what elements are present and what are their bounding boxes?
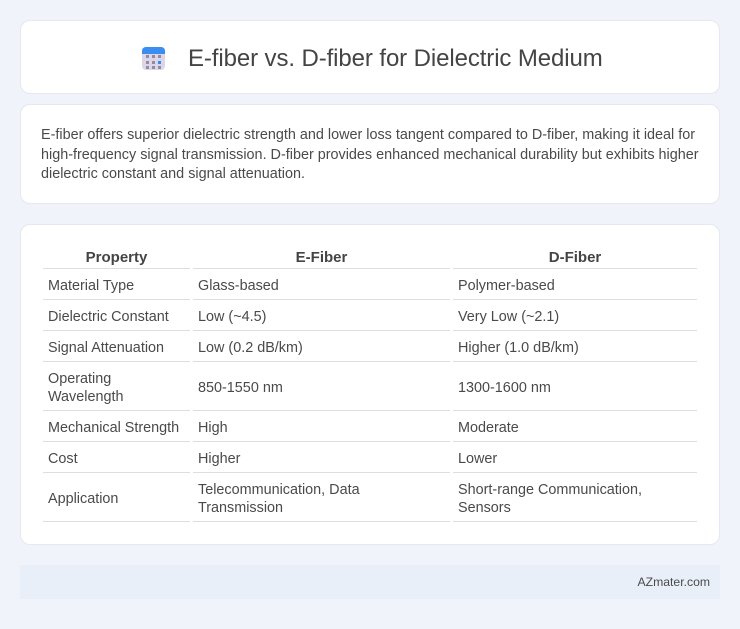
panel: title header	[20, 20, 720, 94]
panel: comparison table	[20, 224, 720, 545]
title: E-fiber vs. D-fiber for Dielectric Medium	[188, 45, 603, 72]
row: material type: Glass-based	[198, 278, 279, 294]
row: operating wavelength: Wavelength	[48, 389, 123, 405]
table header: Property	[86, 249, 147, 266]
table header	[86, 249, 601, 266]
row: application: Short-range Communication,	[458, 482, 642, 498]
summary text	[41, 127, 699, 182]
row: operating wavelength: Operating	[48, 371, 111, 387]
row: dielectric constant: Very Low (~2.1)	[458, 309, 559, 325]
row: cost	[48, 451, 497, 467]
summary text: high-frequency signal transmission. D-fiber provides enhanced mechanical durability but exhibits higher	[41, 146, 699, 162]
row: dielectric constant	[48, 309, 559, 325]
footer source text: AZmater.com	[638, 575, 710, 589]
row: operating wavelength: 850-1550 nm	[198, 380, 283, 396]
row: signal attenuation: Higher (1.0 dB/km)	[458, 340, 579, 356]
row: application: Transmission	[198, 500, 283, 516]
row: application: Application	[48, 491, 118, 507]
row: dielectric constant: Dielectric Constant	[48, 309, 169, 325]
row: cost: Lower	[458, 451, 497, 467]
row: application: Telecommunication, Data	[198, 482, 360, 498]
table header: D-Fiber	[549, 249, 601, 266]
row: application: Sensors	[458, 500, 511, 516]
icon: calendar	[142, 47, 165, 70]
row: material type: Polymer-based	[458, 278, 555, 294]
row: mechanical strength	[48, 420, 519, 436]
row: material type: Material Type	[48, 278, 134, 294]
summary text: dielectric constant and signal attenuation.	[41, 166, 305, 182]
panel: summary	[20, 104, 720, 204]
row: mechanical strength: Mechanical Strength	[48, 420, 179, 436]
row: cost: Cost	[48, 451, 78, 467]
row: operating wavelength	[48, 371, 551, 405]
row: operating wavelength: 1300-1600 nm	[458, 380, 551, 396]
row: signal attenuation: Signal Attenuation	[48, 340, 164, 356]
row: application	[48, 482, 642, 516]
row: material type	[48, 278, 555, 294]
row: signal attenuation: Low (0.2 dB/km)	[198, 340, 303, 356]
row: signal attenuation	[48, 340, 579, 356]
row: mechanical strength: Moderate	[458, 420, 519, 436]
row: dielectric constant: Low (~4.5)	[198, 309, 266, 325]
summary text: E-fiber offers superior dielectric strength and lower loss tangent compared to D-fiber, making it ideal for	[41, 127, 695, 143]
footer bar	[20, 565, 720, 599]
row: cost: Higher	[198, 451, 240, 467]
table header: E-Fiber	[296, 249, 347, 266]
row: mechanical strength: High	[198, 420, 228, 436]
